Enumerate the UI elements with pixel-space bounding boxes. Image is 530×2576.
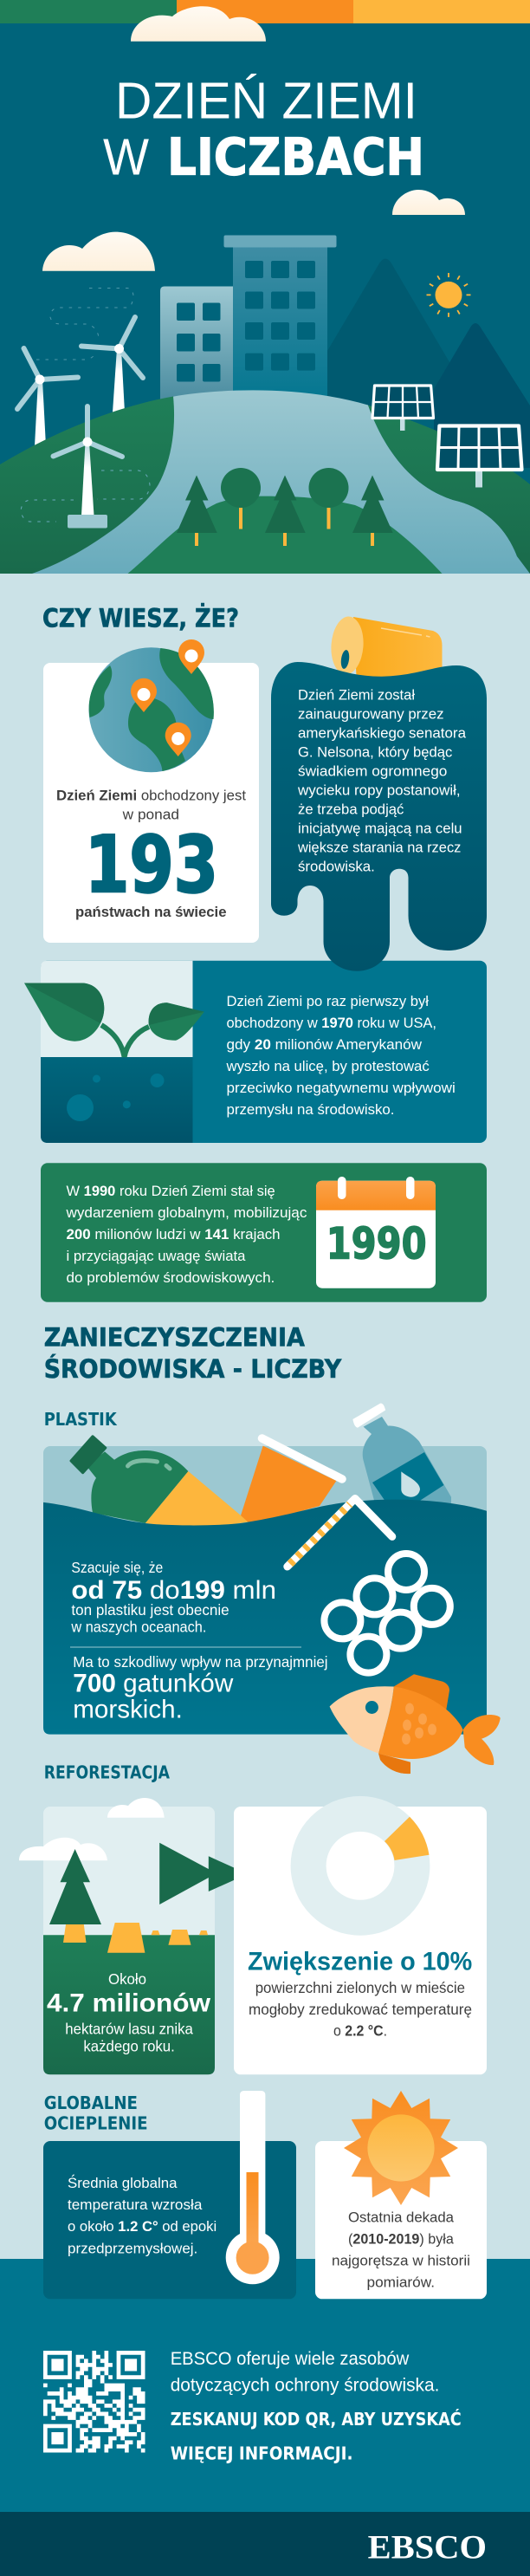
icon: sun xyxy=(344,2091,458,2205)
card text: najgorętsza w historii xyxy=(332,2253,470,2268)
subheading: reforestation: REFORESTACJA xyxy=(44,1762,170,1782)
footer bar xyxy=(0,2512,530,2576)
panel text xyxy=(47,1970,211,2054)
card text: pomiarów. xyxy=(367,2274,435,2291)
icon: globe with pins xyxy=(88,639,214,772)
conifer tree 2 xyxy=(265,475,306,546)
panel text xyxy=(226,993,456,1118)
title xyxy=(103,73,424,187)
road xyxy=(32,390,530,574)
card xyxy=(43,663,259,943)
blob text xyxy=(297,686,467,874)
title: W xyxy=(103,129,149,186)
donut chart xyxy=(291,1796,430,1936)
section heading: czy wiesz: CZY WIESZ, ŻE? xyxy=(42,603,239,633)
pin 3 xyxy=(165,723,191,756)
stumps xyxy=(63,1923,208,1953)
plastic text: w naszych oceanach. xyxy=(70,1618,206,1635)
blob text: amerykańskiego senatora xyxy=(298,724,467,741)
plastic text: od 75 do199 mln xyxy=(71,1576,276,1605)
building right xyxy=(223,236,336,411)
panel text: 4.7 milionów xyxy=(47,1989,211,2018)
section heading: pollution: ŚRODOWISKA - LICZBY xyxy=(44,1354,342,1384)
cloud top xyxy=(131,6,266,42)
icon: fish xyxy=(330,1674,501,1774)
subheading: global warming: OCIEPLENIE xyxy=(44,2113,148,2134)
panel text: i przyciągając uwagę świata xyxy=(66,1248,246,1264)
ground xyxy=(43,1935,215,2074)
wind turbine A xyxy=(17,348,78,446)
card xyxy=(234,1807,487,2074)
panel text: do problemów środowiskowych. xyxy=(66,1269,275,1286)
pin 2 xyxy=(131,678,157,712)
blob text: inicjatywę mającą na celu xyxy=(298,820,462,836)
panel text xyxy=(65,1183,307,1286)
icon: green bottle xyxy=(71,1437,249,1529)
plastic text: ton plastiku jest obecnie xyxy=(71,1601,229,1619)
card text: powierzchni zielonych w mieście xyxy=(255,1979,465,1996)
panel text: przedprzemysłowej. xyxy=(68,2240,197,2256)
hero illustration xyxy=(0,0,530,574)
ocean water xyxy=(43,1500,487,1735)
panel text: o około 1.2 C° od epoki xyxy=(68,2218,217,2235)
logo: EBSCO: EBSCO xyxy=(368,2529,487,2566)
panel: hottest decade xyxy=(315,2091,487,2299)
panel: 193 countries xyxy=(43,639,259,943)
subheading: plastic: PLASTIK xyxy=(44,1409,118,1430)
panel: oil spill xyxy=(271,615,487,971)
subheading: global warming: GLOBALNE xyxy=(44,2093,138,2113)
plastic text: morskich. xyxy=(73,1695,183,1723)
panel: deforestation xyxy=(19,1798,248,2074)
card text: Ostatnia dekada xyxy=(348,2209,455,2225)
panel text: hektarów lasu znika xyxy=(65,2020,193,2037)
title: DZIEŃ ZIEMI xyxy=(115,73,417,130)
plastic text: 700 gatunków xyxy=(73,1670,234,1698)
hero background xyxy=(0,0,530,574)
card text: (2010-2019) była xyxy=(348,2230,454,2248)
panel text: gdy 20 milionów Amerykanów xyxy=(227,1036,423,1053)
blob text: Dzień Ziemi został xyxy=(298,686,415,703)
lower teal background xyxy=(0,2259,530,2512)
card text xyxy=(56,787,246,920)
icon: calendar: 1990 xyxy=(326,1219,427,1269)
icon: water bottle xyxy=(353,1405,451,1516)
call to action text: dotyczących ochrony środowiska. xyxy=(171,2374,439,2395)
card text: o 2.2 °C. xyxy=(333,2021,387,2039)
small sun xyxy=(426,273,471,317)
panel background xyxy=(43,2141,296,2299)
card xyxy=(315,2141,487,2299)
right hill xyxy=(368,406,530,574)
panel text: obchodzony w 1970 roku w USA, xyxy=(227,1015,436,1031)
panel sky xyxy=(43,1446,487,1550)
blob text: G. Nelsona, który będąc xyxy=(298,743,453,760)
panel text: W 1990 roku Dzień Ziemi stał się xyxy=(66,1183,275,1199)
call to action text: WIĘCEJ INFORMACJI. xyxy=(171,2443,353,2464)
panel: temperature xyxy=(43,2091,296,2299)
card text: Dzień Ziemi obchodzony jest xyxy=(56,787,246,803)
round tree 2 xyxy=(308,468,348,529)
solar panel small xyxy=(372,386,433,431)
panel: plastic xyxy=(43,1405,501,1774)
plastic text xyxy=(70,1559,328,1723)
arrows xyxy=(159,1843,248,1904)
oil blob shape xyxy=(271,662,487,971)
icon: six-pack rings xyxy=(324,1554,450,1673)
panel background xyxy=(43,1807,215,2074)
icon: calendar xyxy=(316,1177,436,1288)
wind trails lower xyxy=(21,470,150,522)
subheading: global warming xyxy=(44,2093,148,2134)
cloud upper xyxy=(107,1798,165,1818)
panel: 1990 xyxy=(41,1163,487,1302)
blob text: większe starania na rzecz xyxy=(297,839,461,855)
solar panel large xyxy=(437,426,521,487)
conifer tree 3 xyxy=(352,475,393,546)
call to action text: EBSCO oferuje wiele zasobów xyxy=(171,2348,410,2369)
panel text: wyszło na ulicę, by protestować xyxy=(226,1058,430,1074)
conifer tree 1 xyxy=(177,475,217,546)
card text xyxy=(248,1947,472,2039)
card text: państwach na świecie xyxy=(75,904,227,920)
pine tree xyxy=(49,1849,101,1924)
left hill xyxy=(0,397,174,574)
panel text: każdego roku. xyxy=(83,2037,175,2054)
call to action text xyxy=(171,2348,462,2464)
plastic text: Ma to szkodliwy wpływ na przynajmniej xyxy=(73,1653,328,1671)
cloud right xyxy=(392,190,465,215)
card text: 193 xyxy=(85,820,218,911)
round tree 1 xyxy=(221,468,261,529)
pin 1 xyxy=(178,639,204,674)
card text xyxy=(332,2209,470,2291)
icon: thermometer xyxy=(226,2091,280,2284)
icon: drinking straw xyxy=(288,1499,392,1567)
card text: Zwiększenie o 10% xyxy=(248,1947,472,1976)
wind turbine B xyxy=(81,317,143,412)
blob text: wycieku ropy postanowił, xyxy=(297,782,461,798)
panel text: 200 milionów ludzi w 141 krajach xyxy=(66,1226,281,1243)
icon: oil barrel xyxy=(329,615,442,685)
colour stripes xyxy=(0,0,530,23)
panel text: Około xyxy=(108,1970,146,1988)
section heading: pollution: ZANIECZYSZCZENIA xyxy=(44,1323,306,1353)
blob text: świadkiem ogromnego xyxy=(298,762,447,779)
panel text xyxy=(68,2175,217,2256)
blob text: że trzeba podjąć xyxy=(298,801,404,817)
wind trails upper xyxy=(36,288,133,360)
title: LICZBACH xyxy=(167,127,424,187)
trees xyxy=(177,468,393,546)
cloud left xyxy=(42,232,155,271)
icon: plastic cup xyxy=(241,1438,342,1525)
plastic text: Szacuje się, że xyxy=(71,1559,163,1576)
card text: mogłoby zredukować temperaturę xyxy=(249,2001,472,2018)
panel text: przemysłu na środowisko. xyxy=(227,1101,395,1118)
panel text: Średnia globalna xyxy=(68,2175,178,2191)
panel text: przeciwko negatywnemu wpływowi xyxy=(227,1080,456,1096)
centre hill xyxy=(128,496,442,574)
plant soil xyxy=(41,1057,192,1143)
blob text: zainaugurowany przez xyxy=(298,705,443,722)
panel background xyxy=(41,1163,487,1302)
panel background xyxy=(41,961,487,1143)
card text: w ponad xyxy=(122,806,179,822)
qr code xyxy=(43,2351,145,2452)
blob text: środowiska. xyxy=(298,858,375,874)
panel text: wydarzeniem globalnym, mobilizując xyxy=(65,1204,307,1221)
panel text: Dzień Ziemi po raz pierwszy był xyxy=(227,993,429,1009)
icon: seedling xyxy=(24,983,204,1057)
wind turbine C xyxy=(54,406,122,529)
panel: green spaces xyxy=(234,1796,487,2074)
panel text: temperatura wzrosła xyxy=(68,2196,203,2213)
plant sky xyxy=(41,961,192,1057)
section heading: pollution xyxy=(44,1323,342,1384)
call to action text: ZESKANUJ KOD QR, ABY UZYSKAĆ xyxy=(171,2409,462,2430)
building left xyxy=(160,286,234,416)
cloud lower xyxy=(19,1838,107,1860)
panel: first celebration 1970 xyxy=(24,961,487,1143)
mountains xyxy=(327,258,530,468)
